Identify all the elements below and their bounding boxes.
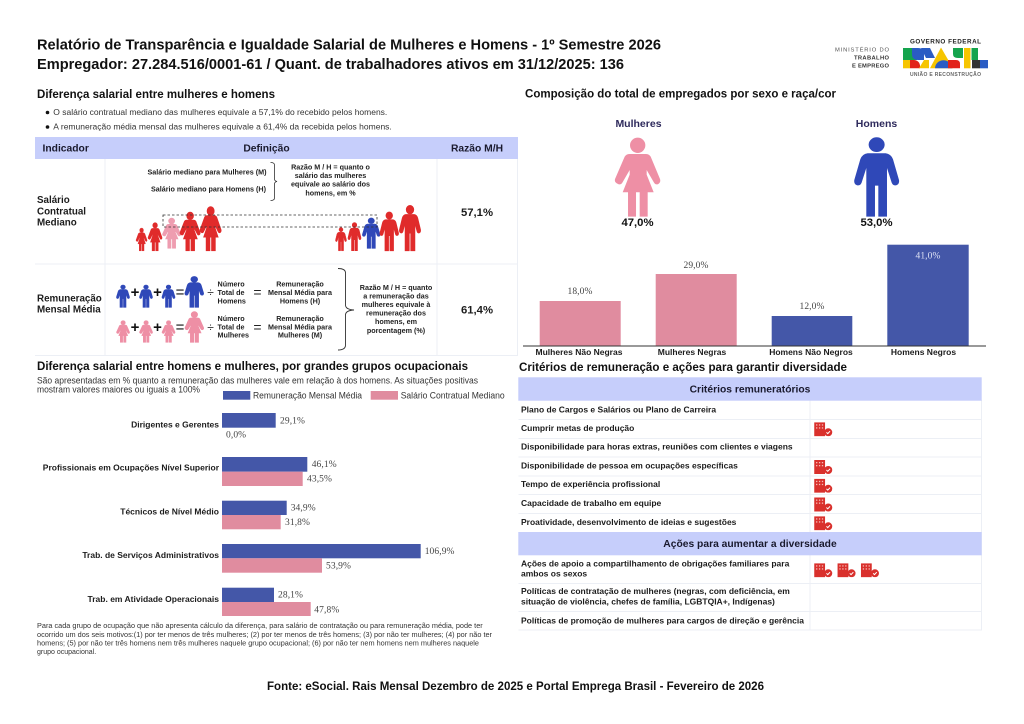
- definition: salário mediano: Salário mediano para Mulheres (M): [147, 168, 267, 176]
- men total: Homens: [856, 118, 897, 130]
- brace and definition: remuneração: mulheres equivale à: [362, 300, 431, 309]
- legend: Salário Contratual Mediano: [401, 390, 505, 400]
- row label: remuneração mensal média: [37, 294, 102, 316]
- group: dirigentes e gerentes: 0,0%: [226, 431, 246, 441]
- bar: mulheres negras: 29,0%: [683, 261, 709, 271]
- bullets: O salário contratual mediano das mulheres equivale a 57,1% do recebido pelos homens.: [53, 107, 387, 117]
- panel: criteria table: [518, 377, 982, 630]
- women total: 47,0%: [621, 217, 654, 229]
- group: atividade operacionais: [88, 588, 339, 616]
- brace and definition: remuneração: [338, 268, 433, 350]
- bar: homens não negros: 12,0%: [799, 302, 825, 312]
- bar: homens negros: Homens Negros: [891, 347, 956, 357]
- formula: women: Mensal Média para: [268, 322, 333, 331]
- row label: remuneração mensal média: Remuneração: [37, 294, 102, 304]
- criteria rows: Proatividade, desenvolvimento de ideias e sugestões: [521, 517, 737, 527]
- brace and definition: remuneração: remuneração dos: [366, 309, 426, 318]
- group: técnicos: [120, 501, 316, 529]
- table header: Definição: [243, 144, 290, 154]
- definition: salário mediano: Salário mediano para Homens (H): [151, 184, 267, 194]
- formula: women: Remuneração: [276, 314, 324, 323]
- formula: women: [117, 312, 333, 342]
- heading: diferença salarial: Diferença salarial entre mulheres e homens: [37, 88, 275, 101]
- brace and definition: remuneração: a remuneração das: [363, 292, 429, 300]
- formula: men: +: [131, 284, 140, 301]
- bar: mulheres negras: Mulheres Negras: [658, 347, 727, 357]
- criteria rows: [521, 404, 793, 527]
- formula: men: =: [253, 284, 262, 300]
- bar: homens não negros: Homens Não Negros: [769, 347, 853, 357]
- formula: men: Homens: [218, 296, 246, 305]
- group: dirigentes e gerentes: 29,1%: [280, 416, 305, 426]
- formula: men: Remuneração: [276, 280, 324, 288]
- logo: ministério: MINISTÉRIO DO: [835, 47, 889, 54]
- criteria rows: Capacidade de trabalho em equipe: [521, 498, 662, 508]
- logo: governo federal brasil: [903, 38, 988, 78]
- group: serviços administrativos: 53,9%: [326, 562, 351, 572]
- title: Empregador: 27.284.516/0001-61 / Quant. de trabalhadores ativos em 31/12/2025: 136: [37, 57, 624, 73]
- criteria rows: Cumprir metas de produção: [521, 423, 634, 433]
- subtitle text: [37, 375, 479, 394]
- definition: salário mediano: Razão M / H = quanto o: [291, 162, 371, 172]
- criteria rows: Disponibilidade de pessoa em ocupações específicas: [521, 461, 738, 471]
- row label: salário contratual mediano: Salário: [37, 195, 70, 206]
- bar: mulheres negras: [656, 261, 737, 357]
- formula: women: Mulheres: [218, 331, 249, 340]
- value: 61,4%: 61,4%: [461, 305, 493, 317]
- formula: men: [116, 276, 333, 307]
- action rows: ambos os sexos: [521, 569, 587, 579]
- group: profissionais: 43,5%: [307, 475, 332, 485]
- group: técnicos: 31,8%: [285, 518, 310, 528]
- bar: homens negros: 41,0%: [915, 252, 941, 262]
- icons: criteria marks: [814, 422, 832, 530]
- action rows: situação de violência, chefes de família, LGBTQIA+, Indígenas): [521, 596, 775, 606]
- logo: ministério: TRABALHO: [854, 55, 889, 61]
- subtitle text: São apresentadas em % quanto a remuneração das mulheres vale em relação à dos homens. As situações positivas: [37, 375, 479, 385]
- group: dirigentes e gerentes: [131, 413, 305, 441]
- formula: women: Total de: [218, 322, 245, 331]
- row label: salário contratual mediano: Contratual: [37, 206, 86, 218]
- logo: ministério: E EMPREGO: [852, 63, 889, 69]
- group: dirigentes e gerentes: Dirigentes e Gerentes: [131, 420, 219, 430]
- criteria rows: Disponibilidade para horas extras, reuniões com clientes e viagens: [521, 442, 793, 452]
- brace and definition: remuneração: homens, em: [375, 317, 417, 326]
- formula: men: Mensal Média para: [268, 288, 333, 297]
- group: profissionais: [43, 457, 337, 486]
- group: técnicos: Técnicos de Nível Médio: [120, 506, 219, 516]
- formula: women: Número: [218, 314, 245, 323]
- action rows: Políticas de promoção de mulheres para cargos de direção e gerência: [521, 615, 804, 625]
- header: critérios remuneratórios: [518, 377, 982, 401]
- heading: critérios: Critérios de remuneração e ações para garantir diversidade: [519, 361, 848, 374]
- logo: governo federal brasil: GOVERNO FEDERAL: [910, 38, 981, 46]
- formula: men: Número: [218, 280, 245, 288]
- figures: median men: [335, 206, 421, 251]
- action rows: [521, 559, 804, 625]
- table header: Indicador: [42, 144, 89, 154]
- women total: [615, 118, 662, 229]
- header: ações: [518, 532, 982, 555]
- criteria rows: Tempo de experiência profissional: [521, 479, 660, 489]
- formula: men: Total de: [218, 288, 245, 297]
- formula: women: +: [131, 319, 140, 336]
- subtitle text: mostram valores maiores ou iguais a 100%: [37, 384, 200, 394]
- bar chart: raça/cor: [523, 245, 986, 357]
- definition: salário mediano: equivale ao salário dos: [291, 180, 370, 188]
- dashed median connector: [163, 215, 377, 227]
- brace and definition: remuneração: porcentagem (%): [367, 326, 426, 335]
- footnote: [37, 623, 493, 656]
- panel: indicator table: [35, 137, 518, 356]
- formula: women: =: [253, 319, 262, 335]
- formula: women: Mulheres (M): [278, 331, 323, 340]
- bullets: A remuneração média mensal das mulheres equivale a 61,4% da recebida pelos homens.: [53, 122, 392, 132]
- row label: salário contratual mediano: Mediano: [37, 218, 77, 228]
- bullets: [46, 107, 392, 132]
- footnote: homens; (5) por não ter três homens nem três mulheres naquele grupo ocupacional; (6) por não ter nem homens nem mulheres naquele: [37, 640, 479, 648]
- men total: 53,0%: [860, 217, 893, 229]
- source: Fonte: eSocial. Rais Mensal Dezembro de 2025 e Portal Emprega Brasil - Fevereiro de 2026: [267, 679, 764, 693]
- action rows: Políticas de contratação de mulheres (negras, com deficiência, em: [521, 586, 790, 596]
- formula: men: +: [153, 284, 162, 301]
- table header: Razão M/H: [451, 144, 503, 154]
- row label: remuneração mensal média: Mensal Média: [37, 305, 101, 316]
- formula: men: Homens (H): [280, 296, 321, 305]
- legend: Remuneração Mensal Média: [253, 390, 362, 400]
- group: serviços administrativos: [82, 544, 455, 573]
- action rows: Ações de apoio a compartilhamento de obrigações familiares para: [521, 559, 790, 569]
- logo: ministério: [835, 47, 889, 69]
- bar: homens não negros: [769, 302, 853, 357]
- title: [37, 38, 661, 73]
- header: critérios remuneratórios: Critérios remuneratórios: [690, 384, 811, 396]
- heading: por grupos ocupacionais: Diferença salarial entre homens e mulheres, por grandes grupos ocupacionais: [37, 360, 468, 373]
- table header: [42, 144, 503, 154]
- bar: mulheres não negras: 18,0%: [567, 287, 593, 297]
- bar chart: grupos ocupacionais: [43, 413, 455, 616]
- bar: homens negros: [887, 245, 969, 357]
- title: Relatório de Transparência e Igualdade Salarial de Mulheres e Homens - 1º Semestre 2026: [37, 38, 661, 54]
- group: atividade operacionais: 28,1%: [278, 591, 303, 601]
- logo: governo federal brasil: UNIÃO E RECONSTRUÇÃO: [910, 71, 981, 78]
- bar: mulheres não negras: [536, 287, 623, 357]
- criteria rows: Plano de Cargos e Salários ou Plano de Carreira: [521, 404, 716, 414]
- header: ações: Ações para aumentar a diversidade: [663, 539, 837, 550]
- group: técnicos: 34,9%: [291, 504, 316, 514]
- group: serviços administrativos: Trab. de Serviços Administrativos: [82, 550, 219, 560]
- group: atividade operacionais: Trab. em Atividade Operacionais: [88, 594, 219, 604]
- formula: men: ÷: [207, 286, 214, 300]
- women total: Mulheres: [615, 118, 662, 130]
- value: 57,1%: 57,1%: [461, 207, 493, 219]
- group: profissionais: 46,1%: [312, 460, 337, 470]
- formula: women: +: [153, 319, 162, 336]
- formula: women: ÷: [207, 320, 214, 334]
- definition: salário mediano: [147, 162, 371, 200]
- figures: median women: [136, 207, 221, 251]
- icons: action marks: [814, 563, 879, 577]
- footnote: ocorrido um dos seis motivos:(1) por ter menos de três mulheres; (2) por ter menos de três homens; (3) por não ter mulheres; (4) por não ter: [37, 632, 493, 639]
- legend: [223, 390, 505, 400]
- group: atividade operacionais: 47,8%: [314, 606, 339, 616]
- group: serviços administrativos: 106,9%: [425, 547, 455, 557]
- definition: salário mediano: homens, em %: [305, 188, 356, 197]
- bar: mulheres não negras: Mulheres Não Negras: [536, 347, 623, 357]
- formula: women: =: [176, 319, 185, 336]
- formula: men: =: [176, 284, 185, 301]
- brace and definition: remuneração: Razão M / H = quanto: [360, 283, 433, 292]
- footnote: grupo ocupacional.: [37, 649, 96, 656]
- footnote: Para cada grupo de ocupação que não apresenta cálculo da diferença, para salário de contratação ou para remuneração média, pode ter: [37, 623, 483, 630]
- row label: salário contratual mediano: [37, 195, 86, 228]
- men total: [854, 118, 899, 229]
- definition: salário mediano: salário das mulheres: [295, 171, 366, 180]
- group: profissionais: Profissionais em Ocupações Nível Superior: [43, 463, 220, 473]
- heading: composição: Composição do total de empregados por sexo e raça/cor: [525, 88, 836, 100]
